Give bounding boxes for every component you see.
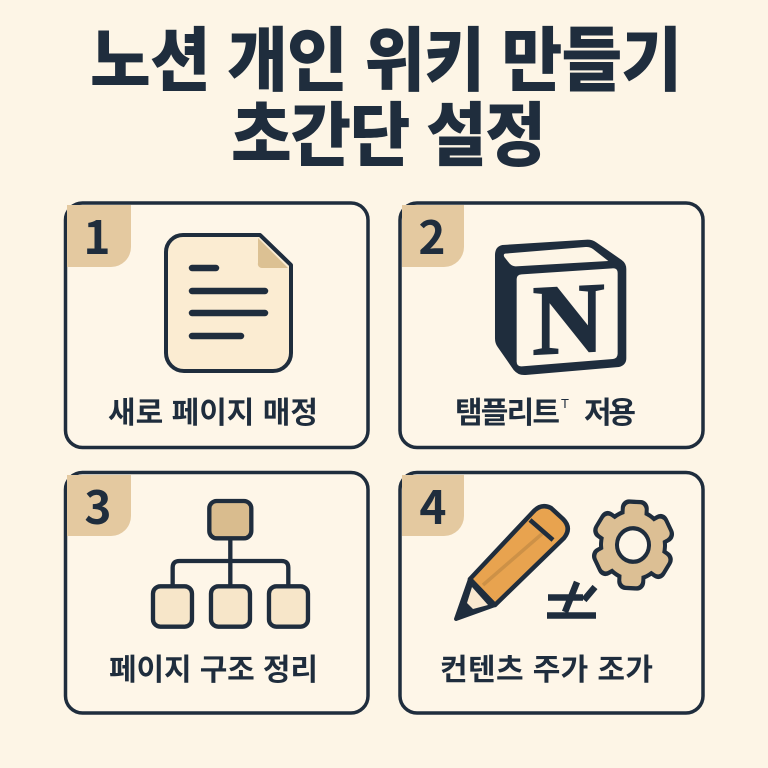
title xyxy=(90,22,682,175)
step 4 number badge xyxy=(402,472,464,538)
step 4 number badge: 4 xyxy=(419,472,447,538)
label: step 3: 페이지 구조 정리 xyxy=(109,654,318,687)
panel: step 1 xyxy=(66,202,368,448)
icon: pencil xyxy=(456,506,568,619)
panel: step 4 xyxy=(400,472,703,713)
icon: notion cube xyxy=(495,240,626,376)
panel: step 3 xyxy=(66,472,368,713)
step 2 number badge xyxy=(402,202,464,268)
label: step 4: 컨텐츠 주가 조가 xyxy=(440,654,653,687)
icon: gear xyxy=(587,497,679,593)
step 1 number badge: 1 xyxy=(83,202,111,268)
label: step 2 xyxy=(455,396,636,430)
icon: notion cube: N xyxy=(532,262,605,376)
title: 초간단 설정 xyxy=(231,97,546,175)
label: step 2: 탬플리트 xyxy=(455,397,560,430)
icon: plus-like symbol xyxy=(547,582,596,616)
label: step 1: 새로 페이지 매정 xyxy=(108,397,318,430)
step 1 number badge xyxy=(67,202,131,268)
panel: step 2 xyxy=(400,202,703,448)
icon: document xyxy=(166,235,291,371)
title: 노션 개인 위키 만들기 xyxy=(90,22,682,100)
step 2 number badge: 2 xyxy=(418,202,446,268)
step 3 number badge xyxy=(67,472,131,538)
label: step 2: 저용 xyxy=(584,397,636,430)
step 3 number badge: 3 xyxy=(84,472,112,538)
label: step 2: T xyxy=(561,396,569,411)
icon: page hierarchy tree xyxy=(153,501,308,627)
